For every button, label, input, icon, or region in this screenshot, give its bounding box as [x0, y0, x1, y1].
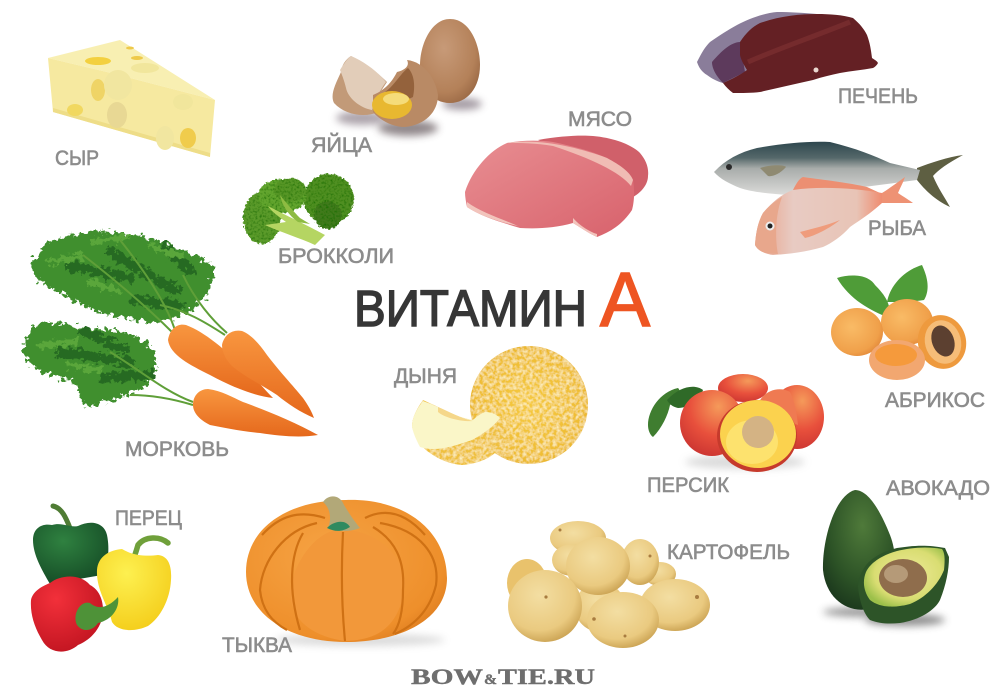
carrot tops: lower bunch: [22, 321, 193, 408]
label: cheese: СЫР: [55, 147, 99, 170]
footer brand: BOW: [411, 664, 483, 689]
icon: apricots: [831, 265, 972, 380]
icon: broccoli: [243, 174, 354, 245]
icon: peppers: [31, 506, 171, 652]
label: fish: РЫБА: [868, 217, 926, 240]
label: broccoli: БРОККОЛИ: [278, 245, 394, 268]
title: [354, 257, 651, 343]
title: ВИТАМИН: [354, 280, 587, 337]
label: carrot: МОРКОВЬ: [125, 438, 229, 461]
label: melon: ДЫНЯ: [394, 365, 457, 388]
footer brand: [411, 664, 595, 689]
label: pepper: ПЕРЕЦ: [115, 507, 182, 530]
icon: pumpkin: [246, 496, 447, 646]
label: potato: КАРТОФЕЛЬ: [667, 541, 790, 564]
icon: potatoes: [507, 521, 710, 648]
icon: peach: [648, 374, 824, 472]
footer brand: &: [484, 672, 497, 688]
footer brand: TIE.RU: [498, 664, 595, 689]
label: peach: ПЕРСИК: [647, 474, 730, 497]
icon: melon: [412, 346, 588, 465]
label: meat: МЯСО: [568, 108, 632, 131]
icon: meat: [465, 136, 648, 237]
icon: liver: [697, 12, 878, 93]
icon: carrots: [22, 231, 318, 436]
icon: fish: [714, 142, 963, 255]
label: liver: ПЕЧЕНЬ: [838, 85, 918, 108]
carrot tops: upper bunch: [30, 231, 227, 335]
label: pumpkin: ТЫКВА: [222, 634, 292, 657]
title: А: [600, 257, 651, 343]
icon: eggs: [333, 19, 482, 136]
icon: cheese: [48, 40, 215, 157]
icon: avocado: [823, 490, 949, 626]
label: apricot: АБРИКОС: [885, 389, 985, 412]
label: avocado: АВОКАДО: [886, 477, 990, 500]
label: eggs: ЯЙЦА: [311, 133, 372, 157]
